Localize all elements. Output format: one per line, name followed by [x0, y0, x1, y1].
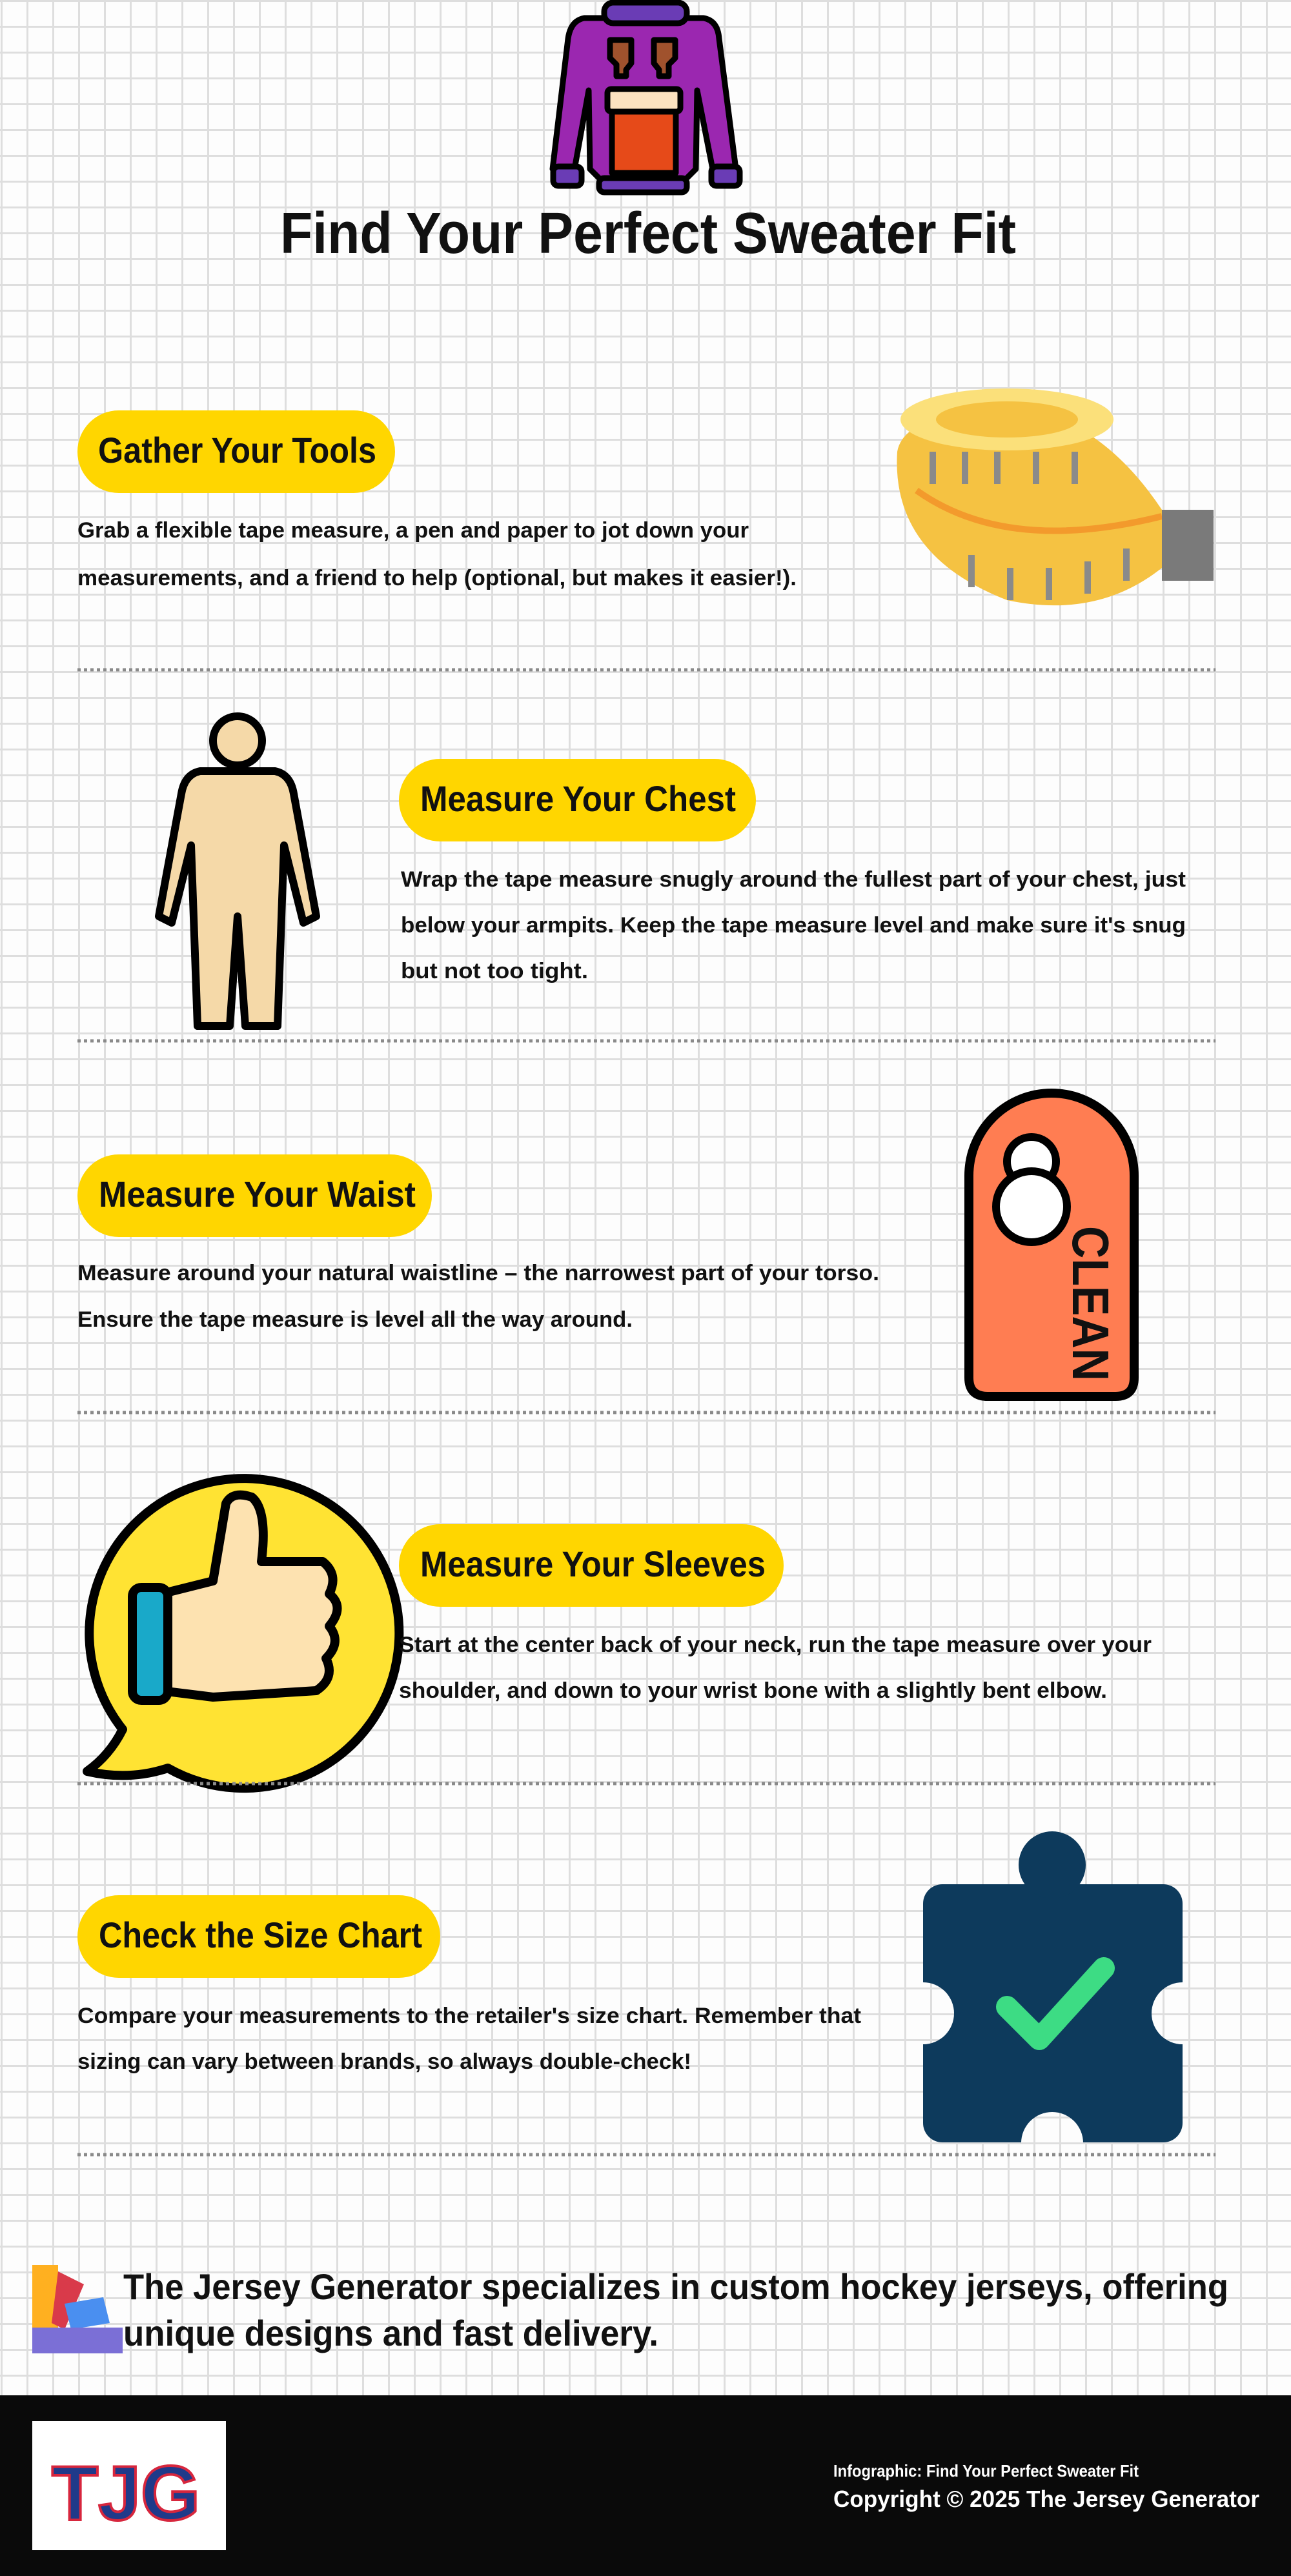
text: gather tools: measurements, and a friend to help (optional, but makes it easier!). [77, 566, 797, 590]
pill heading: gather your tools [77, 410, 395, 493]
text: size chart: sizing can vary between brands, so always double-check! [77, 2049, 691, 2074]
text: chest: Wrap the tape measure snugly around the fullest part of your chest, just [401, 867, 1186, 892]
icon: tape measure [897, 388, 1214, 605]
footer tagline: The Jersey Generator specializes in custom hockey jerseys, offering [123, 2266, 1228, 2307]
pill heading: measure your chest: Measure Your Chest [420, 778, 736, 819]
text: gather tools [77, 518, 797, 590]
logo: TJG [32, 2421, 226, 2550]
text: sleeves [399, 1633, 1152, 1703]
pill heading: measure your sleeves: Measure Your Sleeves [420, 1544, 766, 1584]
text: chest [401, 867, 1186, 983]
footer credits: Copyright © 2025 The Jersey Generator [833, 2486, 1259, 2512]
pill heading: check the size chart: Check the Size Chart [99, 1915, 422, 1955]
icon: palette [32, 2265, 123, 2353]
text: waist: Ensure the tape measure is level all the way around. [77, 1307, 633, 1332]
icon: thumbs up bubble [87, 1478, 399, 1788]
pill heading: check the size chart [77, 1895, 440, 1978]
text: chest: but not too tight. [401, 959, 588, 983]
icon: clean tag: CLEAN [1062, 1226, 1119, 1381]
text: sleeves: Start at the center back of your neck, run the tape measure over your [399, 1633, 1152, 1657]
icon: person [159, 716, 316, 1026]
pill heading: measure your waist [77, 1154, 432, 1237]
text: size chart: Compare your measurements to the retailer's size chart. Remember that [77, 2004, 861, 2028]
icon: sweater [553, 3, 740, 192]
text: waist: Measure around your natural waistline – the narrowest part of your torso. [77, 1261, 879, 1285]
text: waist [77, 1261, 879, 1332]
footer tagline [123, 2266, 1228, 2353]
pill heading: measure your sleeves [399, 1524, 784, 1607]
footer bar [0, 2395, 1291, 2576]
logo: TJG: TJG [52, 2450, 200, 2537]
section: sleeves [87, 1478, 1152, 1788]
section: chest [159, 716, 1186, 1026]
text: size chart [77, 2004, 861, 2074]
dividers [77, 670, 1215, 2155]
pill heading: measure your chest [399, 759, 756, 841]
footer credits [833, 2461, 1259, 2512]
pill heading: measure your waist: Measure Your Waist [99, 1174, 416, 1214]
icon: puzzle check [923, 1831, 1183, 2142]
text: gather tools: Grab a flexible tape measure, a pen and paper to jot down your [77, 518, 749, 543]
title: Find Your Perfect Sweater Fit [280, 201, 1016, 266]
text: chest: below your armpits. Keep the tape measure level and make sure it's snug [401, 913, 1186, 938]
section: gather tools [77, 388, 1214, 605]
footer credits: Infographic: Find Your Perfect Sweater Fit [833, 2461, 1139, 2480]
footer tagline: unique designs and fast delivery. [123, 2313, 658, 2353]
section: size chart [77, 1831, 1183, 2142]
text: sleeves: shoulder, and down to your wrist bone with a slightly bent elbow. [399, 1678, 1107, 1703]
pill heading: gather your tools: Gather Your Tools [98, 430, 376, 470]
section: waist [77, 1093, 1134, 1396]
icon: clean tag [969, 1093, 1134, 1396]
